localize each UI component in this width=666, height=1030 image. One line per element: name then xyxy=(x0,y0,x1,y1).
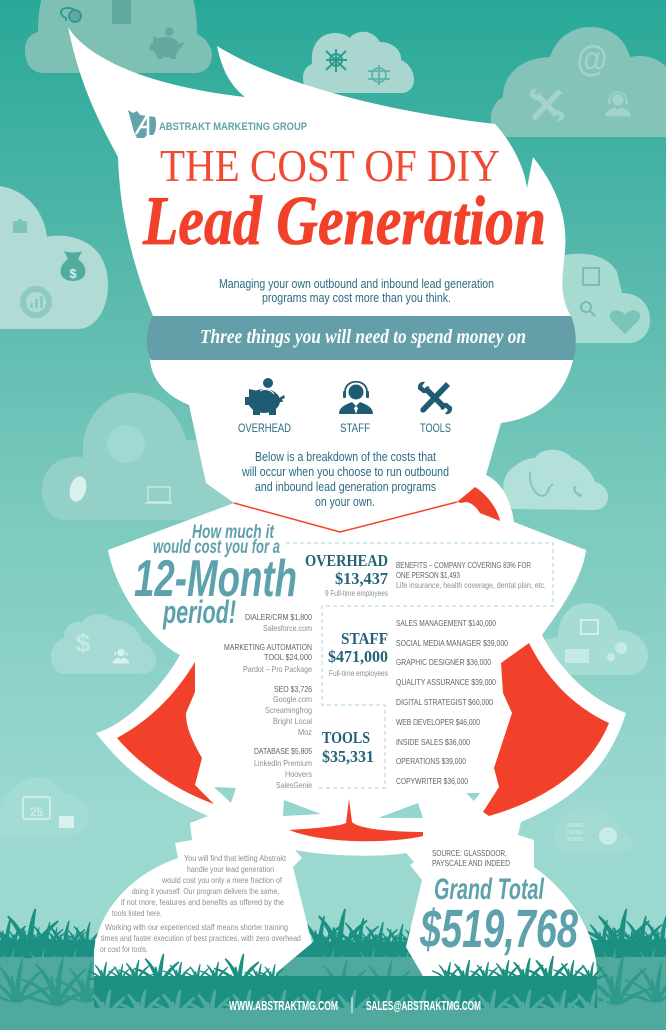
footer: SALES@ABSTRAKTMG.COM xyxy=(366,998,481,1013)
breakdown text: Below is a breakdown of the costs that xyxy=(255,450,436,464)
intro text xyxy=(219,277,494,305)
staff block: STAFF xyxy=(341,629,388,648)
title line two: Lead Generation xyxy=(142,183,546,260)
icon: money bag xyxy=(61,251,85,281)
overhead block xyxy=(305,551,546,598)
title line one: THE COST OF DIY xyxy=(160,141,500,191)
icon: at sign: @ xyxy=(576,38,608,79)
icon: phone xyxy=(574,486,582,496)
icon: binary digits: 011101 xyxy=(567,830,583,836)
closing paragraph: if not more, features and benefits as offered by the xyxy=(121,897,284,907)
logo wordmark: ABSTRAKT MARKETING GROUP xyxy=(159,121,307,133)
tools item list: MARKETING AUTOMATION xyxy=(224,642,312,652)
breakdown text: on your own. xyxy=(315,495,375,509)
12-month heading: period! xyxy=(162,594,236,630)
collar line xyxy=(234,502,457,532)
breakdown text: will occur when you choose to run outbound xyxy=(241,465,449,479)
icon: heart xyxy=(610,310,640,334)
red handle piece with spike xyxy=(289,799,423,841)
staff salary list: SALES MANAGEMENT $140,000 xyxy=(396,618,496,628)
grass behind figure xyxy=(0,909,666,1030)
logo xyxy=(128,110,307,138)
staff block xyxy=(328,629,388,678)
closing paragraph: You will find that letting Abstrakt xyxy=(184,853,287,863)
closing paragraph: tools listed here. xyxy=(112,908,162,918)
icon: mouse xyxy=(67,474,89,504)
icon: globe xyxy=(599,827,617,845)
icon: chart ring xyxy=(23,289,49,315)
cloud: right with stethoscope, phone icons xyxy=(503,450,608,510)
icon: binary digits: 101001 xyxy=(567,823,584,829)
red axe blade left xyxy=(117,662,214,804)
cloud: lower left with dollar, person icons xyxy=(51,614,156,674)
icon: stethoscope xyxy=(530,472,553,496)
icon: tools xyxy=(530,89,564,121)
tools item list: DIALER/CRM $1,800 xyxy=(245,612,312,622)
intro text: Managing your own outbound and inbound lead generation xyxy=(219,277,494,291)
closing paragraph xyxy=(100,853,301,954)
staff block: $471,000 xyxy=(328,647,388,666)
icon: pie chart xyxy=(107,425,145,463)
icon: person xyxy=(112,647,130,664)
tools item list: LinkedIn Premium xyxy=(254,758,312,768)
12-month heading: How much it xyxy=(192,522,274,543)
overhead block: Life insurance, health coverage, dental plan, etc. xyxy=(396,580,546,590)
overhead block: $13,437 xyxy=(335,569,388,588)
icon: piggy bank overhead xyxy=(245,378,285,415)
closing paragraph: doing it yourself. Our program delivers the same, xyxy=(132,886,279,896)
grand total: Grand Total xyxy=(434,873,544,906)
icon: envelope xyxy=(565,649,589,663)
tools item list: SalesGenie xyxy=(276,780,312,790)
source: SOURCE: GLASSDOOR, xyxy=(432,848,507,858)
staff salary list: SOCIAL MEDIA MANAGER $39,000 xyxy=(396,638,508,648)
tools item list: Salesforce.com xyxy=(263,623,312,633)
overhead block: BENEFITS – COMPANY COVERING 83% FOR xyxy=(396,560,531,570)
logo mark xyxy=(128,110,156,138)
tools item list: Screamingfrog xyxy=(265,705,312,715)
icon: notepad xyxy=(583,268,599,285)
icon: magnifier xyxy=(581,302,595,316)
grass in front of figure xyxy=(0,954,666,1030)
overhead block: 9 Full-time employees xyxy=(325,589,388,598)
tools block: $35,331 xyxy=(322,747,374,766)
12-month heading: would cost you for a xyxy=(153,537,280,558)
tools item list: Google.com xyxy=(273,694,312,704)
footer xyxy=(229,997,481,1013)
cloud: top left with chat, server, piggy icons xyxy=(25,0,212,73)
icon: piggy bank xyxy=(150,27,184,59)
intro text: programs may cost more than you think. xyxy=(262,291,451,305)
staff salary list: COPYWRITER $36,000 xyxy=(396,776,468,786)
cloud: lower right with calendar, mail, gear icons xyxy=(543,603,648,675)
cloud: left with phone, money bag, chart icons xyxy=(0,186,108,329)
breakdown text xyxy=(241,450,449,509)
icon: headset staff xyxy=(339,382,373,414)
icon labels xyxy=(238,421,451,435)
source xyxy=(432,848,510,868)
banner xyxy=(147,316,576,360)
cloud: bottom left with calendar xyxy=(0,777,88,836)
icon: server xyxy=(112,0,131,24)
icon: tools xyxy=(418,382,452,414)
icon labels: TOOLS xyxy=(420,421,451,435)
icon: circuit xyxy=(368,65,390,85)
tools item list: Moz xyxy=(298,727,312,737)
icon: binary digits: 110001 xyxy=(567,837,584,843)
icon labels: OVERHEAD xyxy=(238,421,291,435)
icon: chat bubbles xyxy=(61,8,81,22)
grand total xyxy=(419,873,578,959)
tools block: TOOLS xyxy=(322,728,370,747)
staff salary list: INSIDE SALES $36,000 xyxy=(396,737,470,747)
staff salary list: GRAPHIC DESIGNER $36,000 xyxy=(396,657,491,667)
cloud: top right with at-sign, tools, agent icons xyxy=(491,27,666,137)
cloud: bottom right with binary, globe xyxy=(554,808,633,852)
banner text: Three things you will need to spend money on xyxy=(200,326,526,348)
icon: phone xyxy=(13,219,27,233)
closing paragraph: Working with our experienced staff means shorter training xyxy=(105,922,288,932)
closing paragraph: handle your lead generation xyxy=(187,864,274,874)
icon: calendar xyxy=(581,620,598,634)
tools item list: DATABASE $5,805 xyxy=(254,746,312,756)
tools block xyxy=(322,728,374,766)
icon: dollar on bag: $ xyxy=(69,266,77,281)
character silhouette xyxy=(68,27,626,1000)
12-month heading xyxy=(134,522,297,630)
icon: laptop xyxy=(145,487,172,503)
icon: calendar: 25 xyxy=(30,805,43,819)
footer: WWW.ABSTRAKTMG.COM xyxy=(229,998,338,1013)
icon: dollar: $ xyxy=(76,628,91,658)
gaps between arms and handle xyxy=(214,787,480,818)
closing paragraph: or cost for tools. xyxy=(100,944,148,954)
red axe blade right xyxy=(483,643,609,816)
tools item list: Pardot – Pro Package xyxy=(243,664,312,674)
staff salary list xyxy=(396,618,508,786)
12-month heading: 12-Month xyxy=(134,550,297,608)
source: PAYSCALE AND INDEED xyxy=(432,858,510,868)
overhead block: ONE PERSON $1,493 xyxy=(396,570,460,580)
cloud: top middle with network icons xyxy=(303,32,414,93)
tools item list: Bright Local xyxy=(273,716,312,726)
icon: agent xyxy=(605,92,631,116)
staff salary list: QUALITY ASSURANCE $39,000 xyxy=(396,677,496,687)
tools item list: TOOL $24,000 xyxy=(264,652,312,662)
icon: wallet xyxy=(59,816,74,828)
icon: binary digits xyxy=(567,823,584,843)
tools item list: SEO $3,726 xyxy=(274,684,312,694)
icon: gears xyxy=(607,642,627,661)
closing paragraph: would cost you only a mere fraction of xyxy=(161,875,283,885)
staff salary list: WEB DEVELOPER $46,000 xyxy=(396,717,480,727)
icon labels: STAFF xyxy=(340,421,370,435)
tools item list: Hoovers xyxy=(285,769,312,779)
breakdown text: and inbound lead generation programs xyxy=(255,480,436,494)
staff salary list: DIGITAL STRATEGIST $60,000 xyxy=(396,697,493,707)
tools item list xyxy=(224,612,312,790)
icon: spiky brain xyxy=(326,49,347,72)
cloud: middle left with pie, mouse, laptop icons xyxy=(42,393,240,520)
grand total: $519,768 xyxy=(419,899,578,959)
staff salary list: OPERATIONS $39,000 xyxy=(396,756,466,766)
overhead block: OVERHEAD xyxy=(305,551,388,570)
cloud: right with notepad, magnifier, heart icons xyxy=(550,254,650,343)
red collar corner xyxy=(457,487,500,521)
closing paragraph: times and faster execution of best practices, with zero overhead xyxy=(101,933,301,943)
staff block: Full-time employees xyxy=(329,669,388,678)
dashed bracket xyxy=(286,543,553,788)
